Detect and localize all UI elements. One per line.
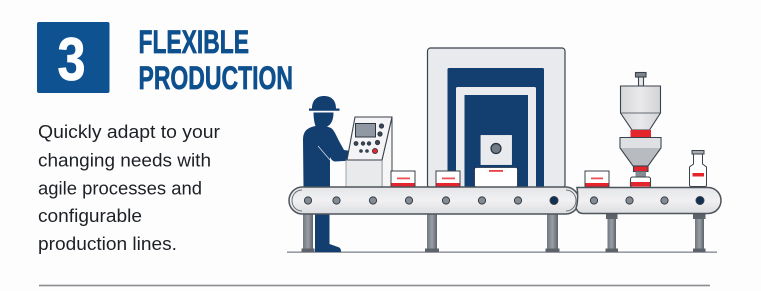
control panel bbox=[346, 117, 392, 187]
icon: hard hat bbox=[309, 96, 340, 111]
number badge: 3 bbox=[58, 26, 86, 93]
title: FLEXIBLE bbox=[138, 24, 249, 60]
product box on second conveyor bbox=[585, 171, 609, 187]
conveyor legs bbox=[302, 214, 560, 252]
product boxes on main conveyor bbox=[391, 171, 460, 187]
bottle bbox=[690, 150, 706, 186]
second conveyor rollers bbox=[590, 196, 704, 204]
description text: agile processes and bbox=[38, 178, 202, 198]
description text bbox=[38, 122, 220, 254]
bottom divider bbox=[39, 285, 710, 286]
description text: production lines. bbox=[38, 234, 177, 254]
machine gantry bbox=[428, 48, 565, 188]
description text: configurable bbox=[38, 206, 142, 226]
number badge bbox=[37, 22, 110, 93]
filling hopper bbox=[620, 72, 661, 188]
description text: Quickly adapt to your bbox=[38, 122, 220, 142]
panel buttons bbox=[354, 124, 384, 152]
main conveyor bbox=[289, 187, 579, 252]
second conveyor legs bbox=[606, 214, 706, 252]
worker bbox=[303, 96, 356, 252]
description text: changing needs with bbox=[38, 150, 211, 170]
conveyor belt bbox=[289, 187, 579, 214]
scanner head and large box bbox=[474, 136, 518, 187]
title bbox=[138, 24, 293, 96]
second conveyor belt bbox=[576, 188, 721, 214]
arm highlight bbox=[318, 146, 330, 160]
conveyor rollers bbox=[304, 196, 558, 204]
second conveyor bbox=[576, 188, 721, 252]
worker body bbox=[303, 112, 356, 252]
panel screen bbox=[356, 124, 376, 137]
title: PRODUCTION bbox=[138, 60, 293, 96]
ground line bbox=[287, 252, 717, 253]
